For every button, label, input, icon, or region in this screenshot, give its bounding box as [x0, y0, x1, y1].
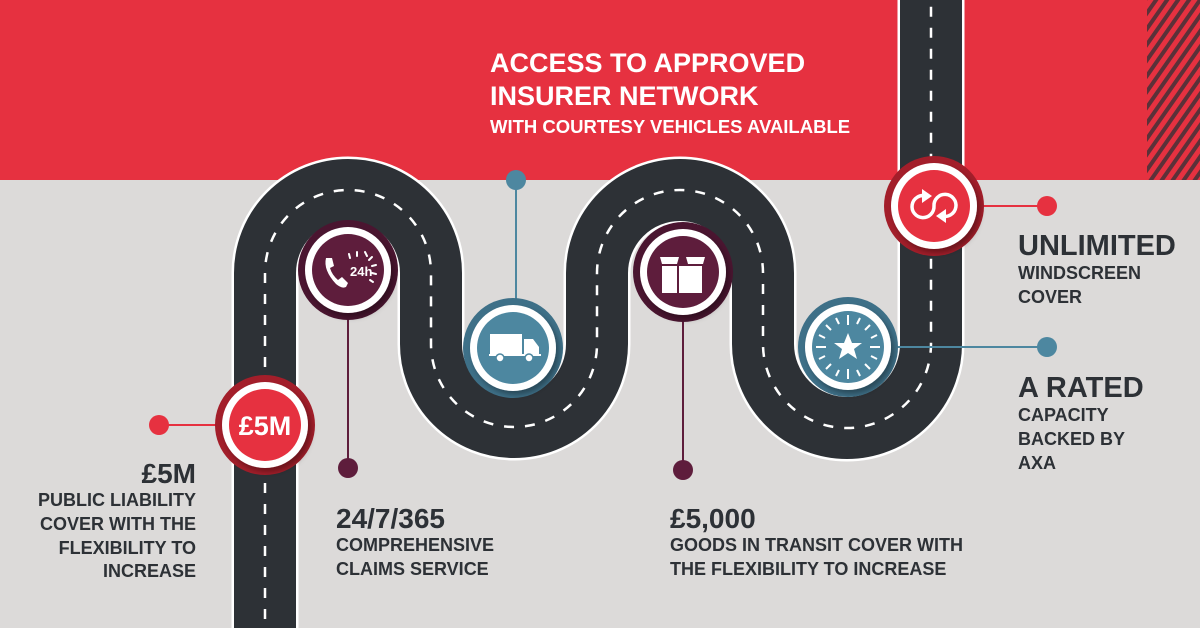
icon: truck: [463, 298, 563, 398]
connector: truck: [506, 170, 526, 320]
icon: 24h phone: 24h: [350, 264, 372, 279]
connector: 24h: [338, 300, 358, 478]
connector: £5M: [149, 415, 230, 435]
connector: rating: [880, 337, 1057, 357]
icon: star rating: [798, 297, 898, 397]
text: £5,000 goods in transit: £5,000: [670, 503, 756, 534]
icon: box: [633, 222, 733, 322]
text: approved insurer network: WITH COURTESY VEHICLES AVAILABLE: [490, 116, 850, 137]
text: unlimited windscreen: [1018, 230, 1176, 307]
text: A rated capacity: BACKED BY: [1018, 429, 1125, 449]
text: £5M public liability: £5M: [142, 458, 196, 489]
text: 24/7/365 claims: COMPREHENSIVE: [336, 535, 494, 555]
text: A rated capacity: A RATED: [1018, 372, 1144, 404]
text: approved insurer network: [490, 48, 850, 137]
hatch pattern decoration: [1147, 0, 1200, 180]
text: £5,000 goods in transit: THE FLEXIBILITY TO INCREASE: [670, 559, 946, 579]
icon: £5M badge: £5M: [239, 411, 291, 441]
text: approved insurer network: INSURER NETWORK: [490, 81, 758, 111]
text: £5M public liability: COVER WITH THE: [40, 514, 196, 534]
text: A rated capacity: [1018, 372, 1144, 473]
text: £5M public liability: [38, 458, 196, 581]
text: approved insurer network: ACCESS TO APPROVED: [490, 48, 805, 78]
text: £5M public liability: PUBLIC LIABILITY: [38, 490, 196, 510]
text: A rated capacity: AXA: [1018, 453, 1056, 473]
icon: 24h phone: [298, 220, 398, 320]
text: 24/7/365 claims: 24/7/365: [336, 503, 445, 534]
connector: windscreen: [960, 196, 1057, 216]
text: £5M public liability: INCREASE: [103, 561, 196, 581]
text: unlimited windscreen: UNLIMITED: [1018, 230, 1176, 262]
text: £5,000 goods in transit: [670, 503, 963, 579]
icon: £5M badge: [215, 375, 315, 475]
text: unlimited windscreen: COVER: [1018, 287, 1082, 307]
icon: unlimited swap: [884, 156, 984, 256]
text: £5M public liability: FLEXIBILITY TO: [59, 538, 196, 558]
text: 24/7/365 claims: [336, 503, 494, 579]
red header band: [0, 0, 1200, 180]
road: [265, 0, 931, 628]
connector: box: [673, 300, 693, 480]
text: unlimited windscreen: WINDSCREEN: [1018, 263, 1141, 283]
text: A rated capacity: CAPACITY: [1018, 405, 1109, 425]
text: 24/7/365 claims: CLAIMS SERVICE: [336, 559, 489, 579]
text: £5,000 goods in transit: GOODS IN TRANSIT COVER WITH: [670, 535, 963, 555]
